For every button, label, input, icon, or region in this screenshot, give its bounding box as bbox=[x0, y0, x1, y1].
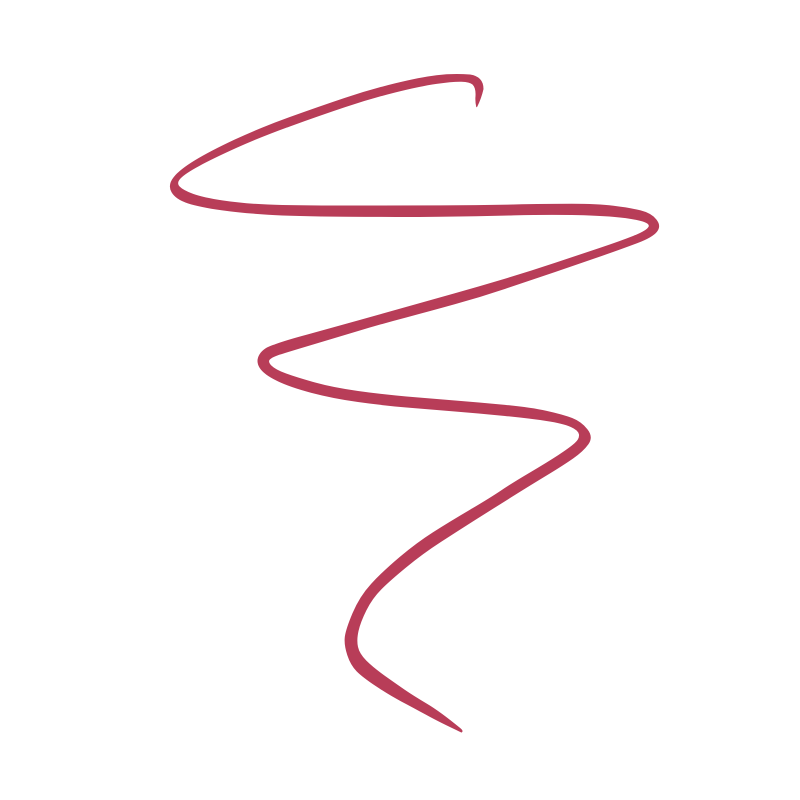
hand-drawn crimson zigzag stroke bbox=[170, 74, 659, 732]
